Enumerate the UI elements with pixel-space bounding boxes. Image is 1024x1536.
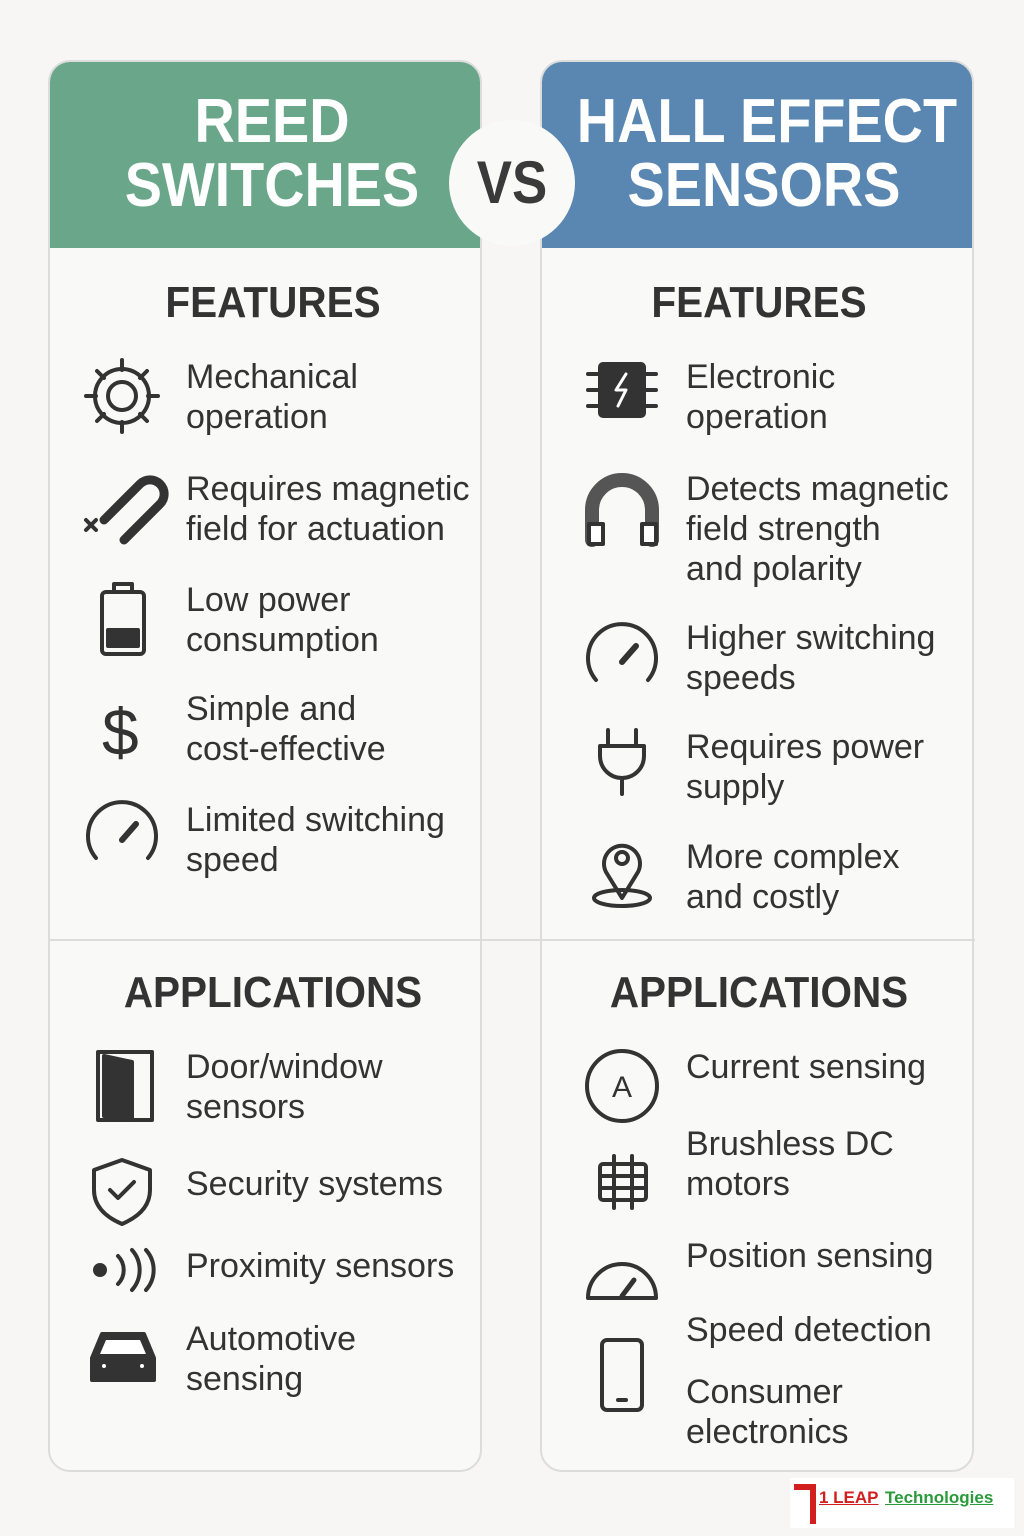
text: Proximity sensors [186, 1247, 454, 1285]
icon: plug [600, 730, 644, 794]
icon: gear [86, 360, 158, 432]
text: and polarity [686, 550, 862, 588]
vs badge [449, 120, 575, 246]
heading: features left: FEATURES [165, 278, 381, 327]
right applications text: Current sensing [686, 1048, 926, 1086]
text: Low power [186, 581, 350, 619]
text: Limited switching [186, 801, 445, 839]
left features text: Mechanical [186, 358, 358, 396]
icon: motor grid [600, 1156, 646, 1208]
logo: 1 LEAP Technologies: 1 LEAP [819, 1488, 879, 1507]
text: speeds [686, 659, 796, 697]
text: Speed detection [686, 1311, 932, 1349]
icon: ammeter [587, 1051, 657, 1121]
text: sensing [186, 1360, 303, 1398]
header: reed switches [50, 62, 480, 248]
text: Security systems [186, 1165, 443, 1203]
header: hall effect sensors [542, 62, 972, 248]
panel: reed switches [48, 60, 482, 1472]
left features text [186, 358, 358, 436]
text: field strength [686, 510, 881, 548]
header: hall effect sensors: SENSORS [628, 151, 900, 220]
panel: hall effect sensors [540, 60, 974, 1472]
vs badge: VS [477, 149, 547, 216]
heading: applications right: APPLICATIONS [610, 968, 908, 1017]
logo: 1 LEAP Technologies: Technologies [885, 1488, 993, 1507]
icon: position gauge [588, 1264, 656, 1298]
icon: door [98, 1052, 152, 1120]
icon: location pin [594, 846, 650, 906]
left applications text: sensors [186, 1088, 305, 1126]
text: electronics [686, 1413, 849, 1451]
text: Simple and [186, 690, 356, 728]
text: cost-effective [186, 730, 386, 768]
text: More complex [686, 838, 900, 876]
icon: ammeter: A [612, 1071, 632, 1104]
text: consumption [186, 621, 379, 659]
left applications text: Door/window [186, 1048, 383, 1086]
header: reed switches: REED [194, 87, 350, 156]
text: speed [186, 841, 279, 879]
header: hall effect sensors: HALL EFFECT [577, 87, 957, 156]
text: Requires magnetic [186, 470, 469, 508]
icon: battery [102, 584, 144, 654]
text: Requires power [686, 728, 924, 766]
icon: magnet [86, 480, 164, 540]
text: Position sensing [686, 1237, 934, 1275]
text: and costly [686, 878, 839, 916]
left features text: operation [186, 398, 328, 436]
icon: proximity [95, 1250, 154, 1290]
text: motors [686, 1165, 790, 1203]
right features text: operation [686, 398, 828, 436]
right features text [686, 358, 835, 436]
right features text: Electronic [686, 358, 835, 396]
text: Higher switching [686, 619, 935, 657]
icon: dollar: $ [102, 695, 139, 769]
header: reed switches: SWITCHES [125, 151, 419, 220]
icon: gauge left [88, 802, 156, 858]
text: Detects magnetic [686, 470, 949, 508]
icon: gauge right [588, 624, 656, 680]
text: Automotive [186, 1320, 356, 1358]
icon: car [92, 1334, 154, 1380]
icon: horseshoe magnet [589, 480, 656, 544]
heading: applications left: APPLICATIONS [124, 968, 422, 1017]
icon: shield [94, 1160, 150, 1224]
heading: features right: FEATURES [651, 278, 867, 327]
text: field for actuation [186, 510, 445, 548]
icon: phone [602, 1340, 642, 1410]
text: supply [686, 768, 784, 806]
left applications text [186, 1048, 383, 1126]
icon: chip [588, 364, 656, 416]
text: Brushless DC [686, 1125, 894, 1163]
divider line [48, 939, 975, 941]
logo: 1 LEAP Technologies [790, 1478, 1014, 1528]
text: Consumer [686, 1373, 843, 1411]
